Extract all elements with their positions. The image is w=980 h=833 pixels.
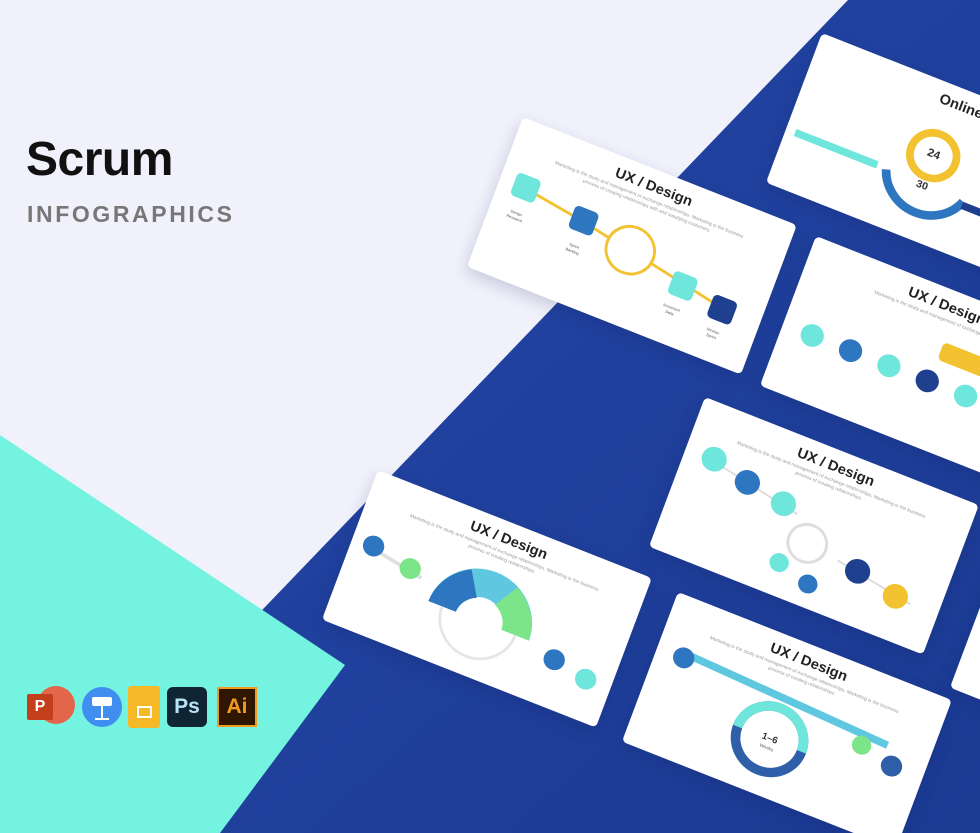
card: UX Design semicircle: UX / Design bbox=[468, 518, 550, 563]
icons: software logos bbox=[27, 686, 257, 728]
subtitle: INFOGRAPHICS bbox=[27, 201, 235, 227]
card: UX Design ring 1-6 weeks bbox=[622, 592, 952, 833]
card: UX Design ring 1-6 weeks: 1–6 bbox=[760, 731, 779, 747]
icon: PowerPoint: P bbox=[35, 698, 45, 715]
icon: Photoshop: Ps bbox=[174, 695, 200, 718]
card: UX Design semicircle bbox=[322, 470, 652, 728]
card: UX Design circle flow: Increment bbox=[663, 302, 681, 313]
icon: Google Slides bbox=[128, 686, 160, 728]
card: UX Design ring 1-6 weeks: Weeks bbox=[758, 742, 775, 754]
icon: Keynote bbox=[82, 687, 122, 727]
card: Online Grocery: 30 bbox=[914, 178, 930, 193]
card: UX Design circle flow: Sprint bbox=[706, 332, 717, 340]
icon: Photoshop bbox=[167, 687, 207, 727]
card: UX Design circle flow: Daily bbox=[665, 309, 675, 317]
card: UX Design hexagons bbox=[649, 397, 979, 655]
icon: PowerPoint bbox=[27, 686, 75, 724]
card: UX Design ring 1-6 weeks: UX / Design bbox=[768, 640, 850, 685]
card: UX Design circle flow: Sprint bbox=[569, 242, 580, 250]
card: UX Design ring 1-6 weeks: Marketing is the study and management of exchange relationships. Marketing is the business process of creating relationships. bbox=[709, 635, 899, 715]
card: Online Grocery bbox=[766, 33, 980, 291]
card: UX Design circles row bbox=[760, 236, 980, 494]
card: UX Design circle flow: UX / Design bbox=[613, 165, 695, 210]
card: Online Grocery: 24 bbox=[925, 147, 942, 163]
card: UX Design circle flow: Backlog bbox=[565, 246, 580, 256]
card: UX Design circle flow bbox=[467, 117, 797, 375]
card: UX Design circle flow: Research bbox=[506, 213, 523, 223]
card: UX Design circle flow: Marketing is the study and management of exchange relationships. Marketing is the business process of creating relationships with and satisfying customers. bbox=[554, 160, 744, 240]
card: UX Design semicircle: Marketing is the study and management of exchange relationships. Marketing is the business process of creating relationships. bbox=[409, 513, 599, 593]
card: partial right edge bbox=[950, 538, 980, 796]
card: UX Design hexagons: Marketing is the study and management of exchange relationships. Marketing is the business process of creating relationships. bbox=[736, 440, 926, 520]
card: UX Design circle flow: Review bbox=[706, 326, 720, 335]
card: UX Design hexagons: UX / Design bbox=[795, 445, 877, 490]
icon: Illustrator bbox=[217, 687, 257, 727]
title: Scrum bbox=[26, 133, 173, 186]
card: UX Design circle flow: Design bbox=[510, 208, 523, 217]
icon: Illustrator: Ai bbox=[226, 695, 248, 718]
